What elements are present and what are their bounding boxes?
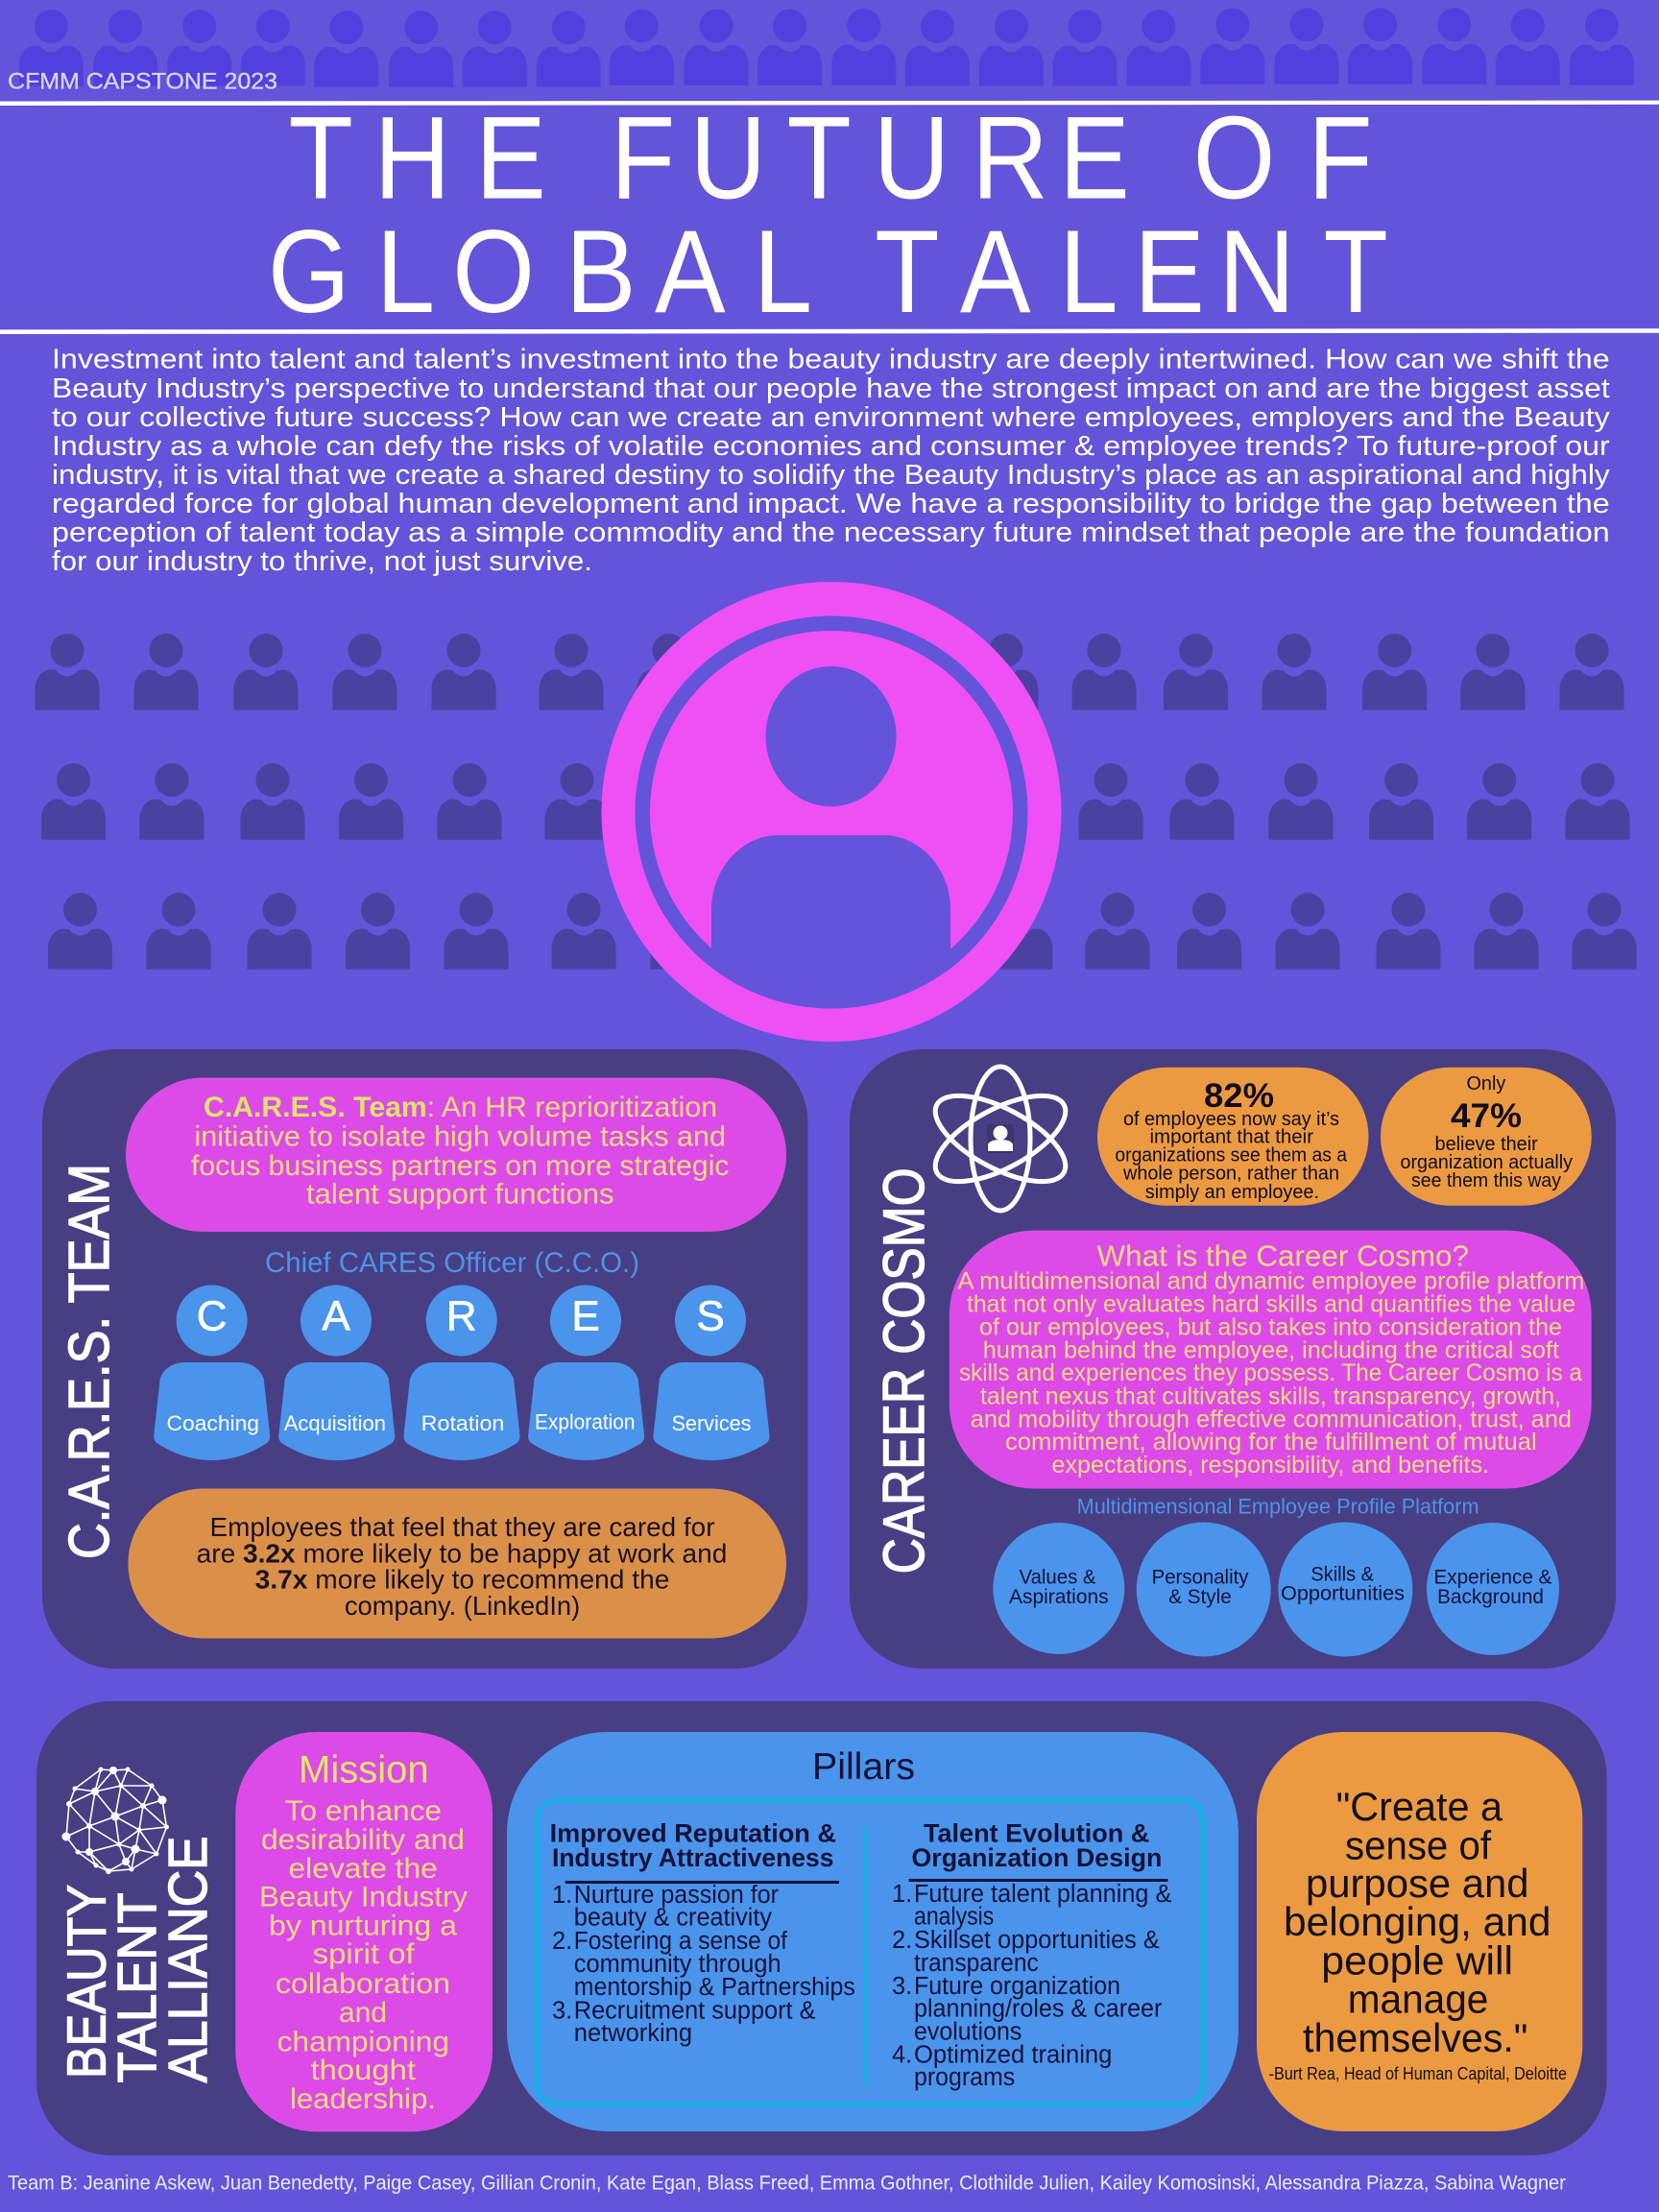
callout: cared-for employees statistic: 3.7x more likely to recommend the <box>255 1565 669 1595</box>
stat bubble: 82%: 82% <box>1204 1077 1274 1115</box>
pillar: Talent Evolution & Organization Design: Skillset opportunities & <box>914 1927 1160 1954</box>
label: CFMM Capstone 2023: CFMM CAPSTONE 2023 <box>8 69 277 94</box>
figure: Coaching: C <box>197 1293 227 1340</box>
pillar: Talent Evolution & Organization Design: Future talent planning & <box>914 1881 1171 1908</box>
callout: What is the Career Cosmo?: expectations, responsibility, and benefits. <box>1052 1452 1489 1479</box>
pillar: Improved Reputation & Industry Attractiveness: 1. <box>552 1882 572 1909</box>
card: quote: belonging, and <box>1284 1899 1551 1944</box>
intro paragraph <box>52 344 1610 577</box>
stat bubble: 47%: see them this way <box>1411 1170 1561 1191</box>
stat bubble: 82%: whole person, rather than <box>1122 1164 1339 1185</box>
icon: atom with person <box>923 1067 1078 1211</box>
card: quote: people will <box>1321 1938 1513 1984</box>
intro paragraph: perception of talent today as a simple commodity and the necessary future mindset that people are the foundation <box>52 517 1610 548</box>
pillar: Improved Reputation & Industry Attractiveness: 2. <box>552 1928 572 1955</box>
callout: cared-for employees statistic: are 3.2x more likely to be happy at work and <box>197 1539 727 1569</box>
circle: Personality & Style: Personality <box>1152 1566 1249 1588</box>
footer: team credits: Team B: Jeanine Askew, Juan Benedetty, Paige Casey, Gillian Cronin, Kate Egan, Blass Freed, Emma Gothner, Clothilde Julien, Kailey Komosinski, Alessandra Piazza, Sabina Wagner <box>8 2172 1566 2195</box>
pillar: Improved Reputation & Industry Attractiveness: beauty & creativity <box>574 1905 772 1932</box>
figure: Exploration: Exploration <box>535 1409 636 1434</box>
callout: What is the Career Cosmo?: of our employees, but also takes into consideration the <box>979 1313 1562 1340</box>
figure: Acquisition: A <box>322 1293 350 1340</box>
icon: network globe <box>61 1767 169 1874</box>
pillar: Improved Reputation & Industry Attractiveness: Industry Attractiveness <box>552 1843 833 1872</box>
callout: C.A.R.E.S. Team definition <box>126 1077 786 1232</box>
circle: Values & Aspirations <box>993 1523 1124 1654</box>
pillar: Talent Evolution & Organization Design: Organization Design <box>911 1843 1162 1872</box>
pillar: Talent Evolution & Organization Design: 3. <box>892 1973 912 2000</box>
card: Mission: thought <box>311 2055 417 2086</box>
figure: Acquisition <box>278 1285 395 1460</box>
figure: Acquisition: Acquisition <box>284 1411 386 1435</box>
figure: Exploration: E <box>571 1293 600 1340</box>
pillar: Improved Reputation & Industry Attractiveness: mentorship & Partnerships <box>574 1974 855 2001</box>
callout: C.A.R.E.S. Team definition: C.A.R.E.S. Team: An HR reprioritization <box>204 1092 717 1123</box>
figure: Rotation <box>403 1285 520 1460</box>
circle: Skills & Opportunities: Skills & <box>1310 1563 1374 1585</box>
callout: cared-for employees statistic: Employees that feel that they are cared for <box>209 1512 714 1542</box>
pillar: Talent Evolution & Organization Design <box>892 1819 1171 2091</box>
title: GLOBALTALENT <box>268 206 1388 337</box>
vertical heading: Beauty Talent Alliance: BEAUTY <box>56 1885 117 2079</box>
figure: Rotation: R <box>446 1293 477 1340</box>
callout: What is the Career Cosmo?: human behind the employee, including the critical soft <box>983 1336 1559 1363</box>
circle: Personality & Style: & Style <box>1168 1586 1232 1608</box>
intro paragraph: to our collective future success? How can we create an environment where employees, employers and the Beauty <box>52 402 1610 433</box>
card: Mission: elevate the <box>288 1853 438 1885</box>
vertical heading: Beauty Talent Alliance: TALENT <box>107 1892 168 2082</box>
intro paragraph: industry, it is vital that we create a shared destiny to solidify the Beauty Industry’s place as an aspirational and highly <box>52 460 1610 491</box>
pillar: Talent Evolution & Organization Design: 4. <box>892 2042 912 2069</box>
stat bubble: 82%: of employees now say it’s <box>1123 1109 1339 1130</box>
callout: What is the Career Cosmo? <box>950 1231 1592 1488</box>
circle: Experience & Background: Background <box>1437 1586 1544 1608</box>
pillar: Talent Evolution & Organization Design: programs <box>914 2064 1015 2091</box>
card: quote: manage <box>1348 1977 1488 2022</box>
circle: Skills & Opportunities: Opportunities <box>1281 1582 1405 1604</box>
stat bubble: 82%: important that their <box>1150 1127 1313 1148</box>
circle: Skills & Opportunities <box>1278 1523 1412 1657</box>
title band rules <box>0 101 1659 334</box>
intro paragraph: Beauty Industry’s perspective to understand that our people have the strongest impact on and are the biggest asset <box>52 373 1610 404</box>
figure: Services: Services <box>672 1411 751 1435</box>
card: Pillars <box>507 1732 1238 2131</box>
pillar: Talent Evolution & Organization Design: analysis <box>914 1904 994 1931</box>
figure: Rotation: Rotation <box>421 1411 504 1435</box>
callout: What is the Career Cosmo?: A multidimensional and dynamic employee profile platform <box>958 1267 1584 1294</box>
pillar: Talent Evolution & Organization Design: Future organization <box>914 1973 1120 2000</box>
circle: Experience & Background: Experience & <box>1434 1566 1551 1588</box>
figure: Services: S <box>696 1293 725 1340</box>
pillars frame <box>538 1800 1203 2104</box>
stat bubble: 47%: Only <box>1467 1073 1505 1094</box>
intro paragraph: Investment into talent and talent’s investment into the beauty industry are deeply intertwined. How can we shift the <box>52 344 1610 374</box>
callout: C.A.R.E.S. Team definition: initiative to isolate high volume tasks and <box>194 1121 726 1153</box>
pillar: Improved Reputation & Industry Attractiveness: networking <box>574 2020 692 2047</box>
card: Mission: championing <box>277 2026 449 2058</box>
callout: cared-for employees statistic: company. (LinkedIn) <box>345 1591 580 1621</box>
stat bubble: 47%: 47% <box>1451 1097 1522 1135</box>
pillar: Improved Reputation & Industry Attractiveness: Improved Reputation & <box>550 1819 836 1848</box>
card: Mission: spirit of <box>313 1938 415 1970</box>
card: Mission: leadership. <box>290 2083 436 2115</box>
card: quote: -Burt Rea, Head of Human Capital, Deloitte <box>1269 2064 1567 2083</box>
background people row: top band <box>19 8 1634 87</box>
pillar: Talent Evolution & Organization Design: evolutions <box>914 2018 1022 2045</box>
callout: What is the Career Cosmo?: talent nexus that cultivates skills, transparency, growth, <box>980 1382 1561 1409</box>
vertical heading: C.A.R.E.S. TEAM: C.A.R.E.S. TEAM <box>58 1164 121 1559</box>
pillar: Talent Evolution & Organization Design: 1. <box>892 1881 912 1908</box>
callout: C.A.R.E.S. Team definition: talent support functions <box>306 1179 614 1210</box>
pillar: Talent Evolution & Organization Design: 2. <box>892 1927 912 1954</box>
card: quote <box>1257 1732 1582 2131</box>
title <box>268 92 1388 337</box>
callout: What is the Career Cosmo?: that not only evaluates hard skills and quantifies the value <box>967 1291 1575 1318</box>
circle: Values & Aspirations: Aspirations <box>1009 1586 1109 1608</box>
vertical heading: Beauty Talent Alliance <box>56 1836 219 2082</box>
subheading: Chief CARES Officer: Chief CARES Officer (C.C.O.) <box>265 1247 639 1279</box>
pillar: Improved Reputation & Industry Attractiveness: 3. <box>552 1997 572 2024</box>
stat bubble: 82%: simply an employee. <box>1145 1182 1319 1203</box>
figure: Coaching <box>154 1285 270 1460</box>
pillar: Talent Evolution & Organization Design: Talent Evolution & <box>924 1819 1149 1848</box>
callout: What is the Career Cosmo?: commitment, allowing for the fulfillment of mutual <box>1005 1429 1537 1455</box>
pillar: Improved Reputation & Industry Attractiveness: Fostering a sense of <box>574 1928 788 1955</box>
pillar: Talent Evolution & Organization Design: planning/roles & career <box>914 1996 1163 2023</box>
callout: cared-for employees statistic <box>128 1488 786 1638</box>
vertical heading: CAREER COSMO: CAREER COSMO <box>872 1167 936 1574</box>
callout: What is the Career Cosmo?: and mobility through effective communication, trust, and <box>971 1406 1572 1432</box>
card: Mission: by nurturing a <box>269 1911 457 1942</box>
panel: C.A.R.E.S. Team <box>42 1049 808 1669</box>
card: Mission: and <box>339 1997 387 2029</box>
circle: Personality & Style <box>1137 1523 1271 1657</box>
panel: Career Cosmo <box>850 1049 1616 1669</box>
figure: Exploration <box>528 1285 644 1460</box>
pillar: Talent Evolution & Organization Design: transparenc <box>914 1950 1039 1977</box>
subheading: Multidimensional Employee Profile Platform: Multidimensional Employee Profile Platform <box>1077 1494 1479 1519</box>
pillar: Improved Reputation & Industry Attractiveness <box>550 1819 855 2047</box>
stat bubble: 47%: organization actually <box>1400 1152 1573 1173</box>
callout: What is the Career Cosmo?: skills and experiences they possess. The Career Cosmo is a <box>959 1359 1582 1386</box>
figure: Coaching: Coaching <box>167 1411 259 1435</box>
card: quote: purpose and <box>1306 1861 1528 1906</box>
stat bubble: 47% <box>1381 1068 1592 1206</box>
crowd of people icons <box>35 634 1636 970</box>
pillar: Improved Reputation & Industry Attractiveness: Recruitment support & <box>574 1997 816 2024</box>
stat bubble: 47%: believe their <box>1434 1134 1538 1155</box>
callout: C.A.R.E.S. Team definition: focus business partners on more strategic <box>191 1150 729 1182</box>
figure: Services <box>653 1285 770 1460</box>
callout: What is the Career Cosmo?: What is the Career Cosmo? <box>1096 1238 1469 1273</box>
card: quote: sense of <box>1345 1822 1491 1867</box>
intro paragraph: for our industry to thrive, not just survive. <box>52 546 592 577</box>
pillar: Improved Reputation & Industry Attractiveness: Nurture passion for <box>574 1882 779 1909</box>
card: quote: "Create a <box>1336 1784 1503 1829</box>
intro paragraph: Industry as a whole can defy the risks of volatile economies and consumer & employee trends? To future-proof our <box>52 431 1610 462</box>
card: Mission: To enhance <box>285 1795 442 1827</box>
card: Mission: Beauty Industry <box>259 1882 468 1912</box>
card: Mission <box>235 1732 493 2131</box>
panel: Beauty Talent Alliance <box>36 1701 1607 2155</box>
card: Mission: collaboration <box>276 1968 450 2000</box>
title: THEFUTUREOF <box>289 92 1373 224</box>
vertical heading: Beauty Talent Alliance: ALLIANCE <box>157 1836 219 2082</box>
pillar: Improved Reputation & Industry Attractiveness: community through <box>574 1951 781 1978</box>
card: quote: themselves." <box>1303 2015 1527 2060</box>
circle: Experience & Background <box>1427 1523 1559 1655</box>
card: Mission: Mission <box>299 1749 429 1791</box>
circle: Values & Aspirations: Values & <box>1020 1566 1096 1588</box>
icon: central person badge <box>601 582 1062 1042</box>
card: Pillars: Pillars <box>812 1746 915 1788</box>
card: Mission: desirability and <box>261 1824 465 1856</box>
stat bubble: 82% <box>1097 1068 1369 1206</box>
intro paragraph: regarded force for global human development and impact. We have a responsibility to bridge the gap between the <box>52 489 1610 519</box>
stat bubble: 82%: organizations see them as a <box>1115 1145 1348 1166</box>
pillar: Talent Evolution & Organization Design: Optimized training <box>914 2042 1112 2069</box>
